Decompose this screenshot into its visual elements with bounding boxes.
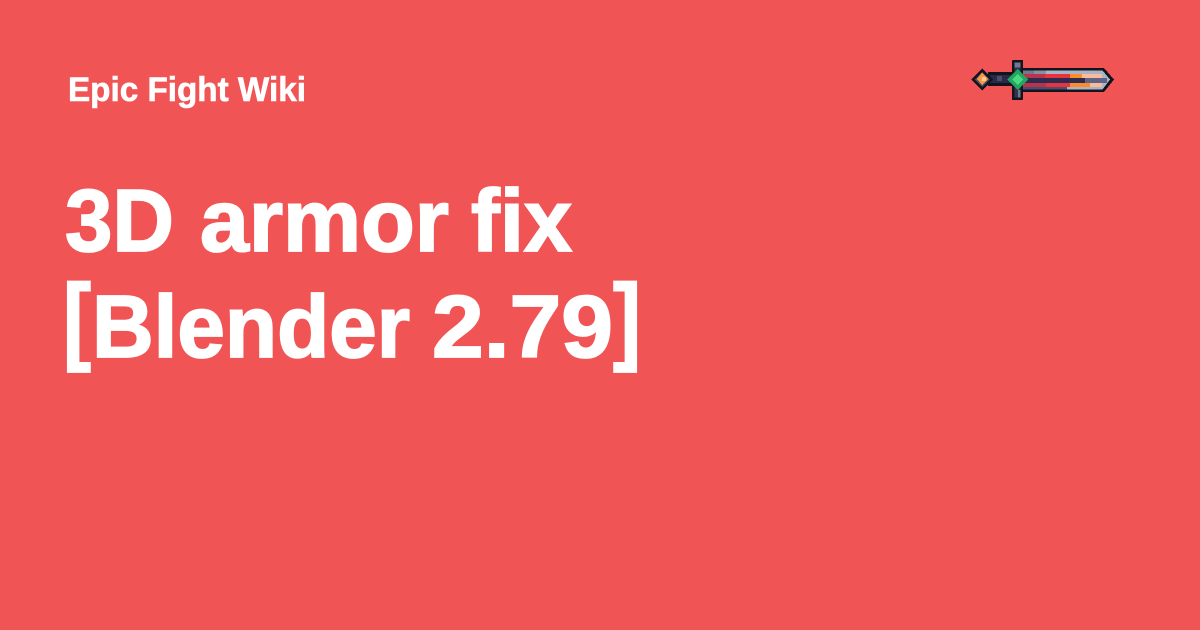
sword crossguard — [1012, 60, 1023, 100]
title: [ — [63, 264, 91, 373]
sword grip — [988, 72, 1014, 86]
title: fix — [471, 171, 572, 270]
sword blade — [1022, 68, 1114, 92]
title: ] — [613, 264, 641, 373]
site name: Epic Fight Wiki — [68, 71, 306, 109]
sword pommel — [972, 68, 993, 90]
title — [63, 171, 641, 376]
icon: pixel sword — [972, 60, 1114, 100]
title: Blender — [92, 277, 410, 376]
title: 2.79 — [432, 277, 613, 376]
sword gem — [1007, 69, 1028, 90]
title: armor — [200, 171, 449, 270]
title: 3D — [65, 171, 174, 270]
